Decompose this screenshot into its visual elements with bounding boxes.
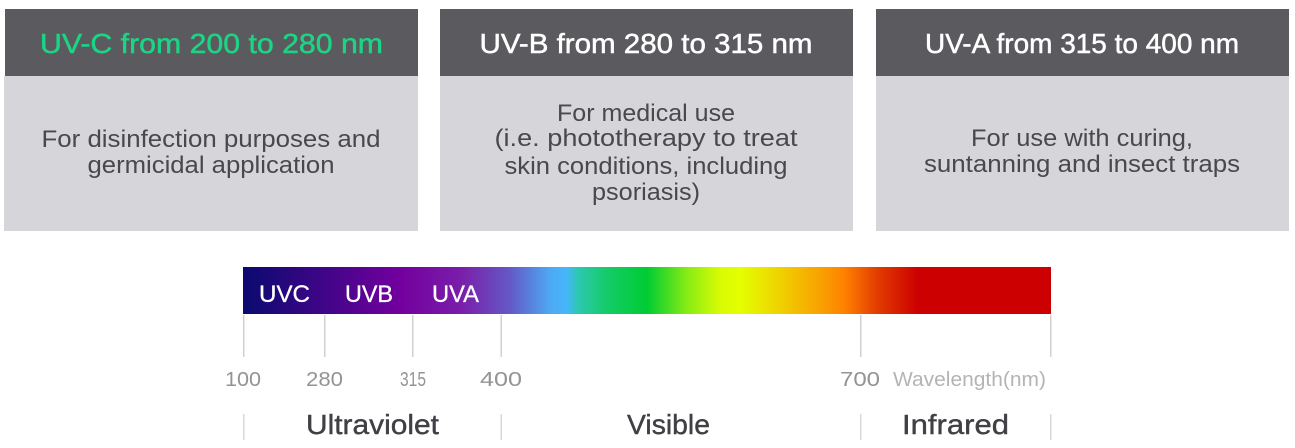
region labels	[306, 409, 1009, 440]
gradient band	[243, 267, 1051, 314]
heading: UV-C range: UV-C from 200 to 280 nm	[40, 28, 383, 59]
header bar: UV-A	[876, 9, 1289, 76]
label: 100: 100	[225, 369, 261, 391]
description: UV-B use: skin conditions, including	[504, 153, 788, 180]
panel body: UV-B	[440, 76, 853, 231]
region: ultraviolet: Ultraviolet	[306, 409, 439, 440]
band label: UVA: UVA	[432, 281, 479, 308]
label: 280: 280	[306, 369, 343, 391]
panel: UV-A	[876, 9, 1289, 231]
panel body: UV-A	[876, 76, 1289, 231]
axis label: wavelength: Wavelength(nm)	[893, 369, 1046, 391]
region: infrared: Infrared	[902, 409, 1009, 440]
heading: UV-A range: UV-A from 315 to 400 nm	[925, 28, 1239, 59]
header bar: UV-B	[440, 9, 853, 76]
description: UV-C use: germicidal application	[88, 152, 334, 179]
description: UV-A use: suntanning and insect traps	[924, 151, 1240, 178]
band label: UVC: UVC	[259, 281, 310, 308]
label: 700: 700	[840, 369, 880, 391]
spectrum bar	[243, 267, 1051, 314]
header bar: UV-C	[5, 9, 418, 76]
band label: UVB: UVB	[345, 281, 393, 308]
heading: UV-B range: UV-B from 280 to 315 nm	[480, 28, 812, 59]
wavelength ticks	[243, 315, 1052, 357]
description: UV-C use: For disinfection purposes and	[42, 126, 380, 153]
label: 400: 400	[480, 369, 522, 391]
description: UV-B use: psoriasis)	[592, 179, 700, 206]
panel: UV-C	[4, 9, 418, 231]
description: UV-A use: For use with curing,	[971, 125, 1193, 152]
description: UV-B use: For medical use	[557, 100, 735, 127]
description: UV-B use: (i.e. phototherapy to treat	[494, 125, 798, 152]
region dividers	[243, 414, 1052, 440]
region: visible: Visible	[627, 409, 710, 440]
panel: UV-B	[440, 9, 853, 231]
wavelength scale labels	[225, 369, 1046, 391]
panel body: UV-C	[4, 76, 418, 231]
label: 315: 315	[400, 369, 426, 391]
